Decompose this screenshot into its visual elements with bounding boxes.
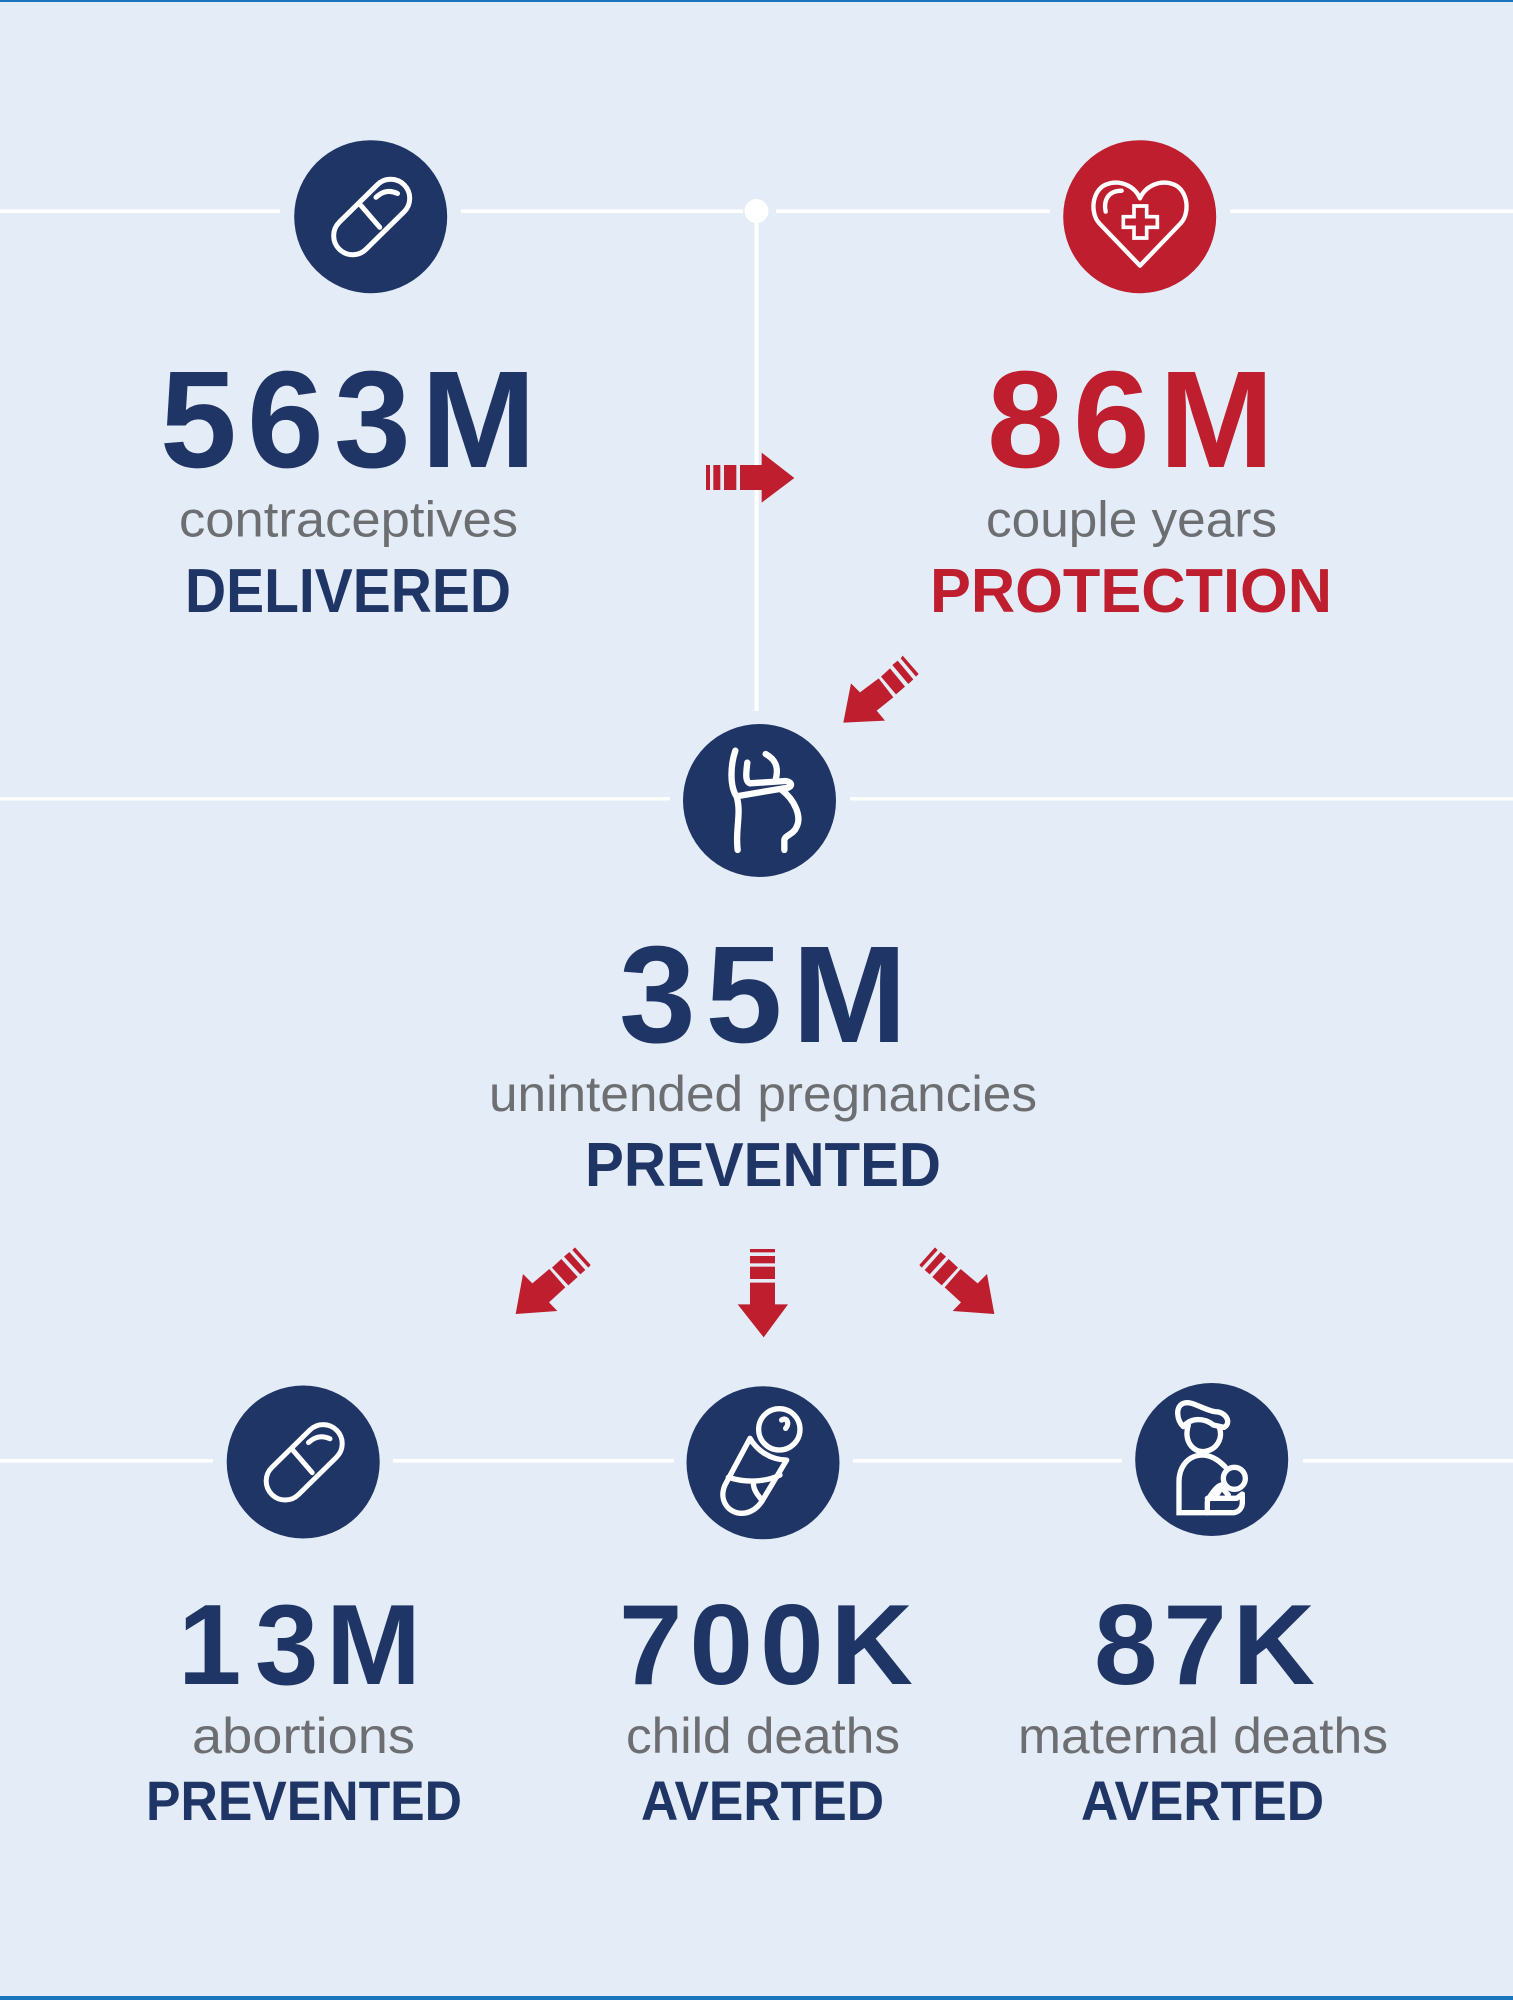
stat: abortions prevented: PREVENTED bbox=[146, 1769, 462, 1832]
stat: unintended pregnancies prevented: 35M bbox=[619, 918, 907, 1072]
stat: abortions prevented: abortions bbox=[192, 1708, 415, 1764]
stat: couple years protection bbox=[930, 343, 1332, 626]
stat: child deaths averted: child deaths bbox=[626, 1708, 900, 1764]
icon: pregnant figure bbox=[683, 724, 836, 877]
stat: contraceptives delivered bbox=[160, 343, 536, 626]
arrows: three outcomes bbox=[516, 1247, 994, 1337]
stat: abortions prevented bbox=[146, 1582, 462, 1832]
stat: unintended pregnancies prevented bbox=[489, 918, 1037, 1200]
icon: pill delivered bbox=[294, 140, 447, 293]
stat: couple years protection: couple years bbox=[986, 492, 1277, 548]
stat: unintended pregnancies prevented: PREVENTED bbox=[585, 1131, 941, 1200]
stat: contraceptives delivered: 563M bbox=[160, 343, 536, 497]
arrow: right bbox=[706, 453, 794, 503]
stat: child deaths averted bbox=[619, 1582, 913, 1832]
arrow: down-left to pregnancy bbox=[843, 656, 919, 723]
stat: abortions prevented: 13M bbox=[178, 1582, 421, 1709]
stat: contraceptives delivered: DELIVERED bbox=[185, 557, 511, 626]
icon: swaddled baby bbox=[686, 1386, 840, 1539]
stat: child deaths averted: AVERTED bbox=[641, 1769, 884, 1832]
icon: heart with cross bbox=[1063, 140, 1216, 293]
stat: maternal deaths averted: AVERTED bbox=[1081, 1769, 1324, 1832]
stat: unintended pregnancies prevented: unintended pregnancies bbox=[489, 1066, 1037, 1122]
icon: pill abortions bbox=[227, 1386, 380, 1538]
stat: couple years protection: PROTECTION bbox=[930, 557, 1332, 626]
stat: maternal deaths averted: maternal deaths bbox=[1018, 1708, 1388, 1764]
connector dot bbox=[744, 199, 768, 223]
stat: contraceptives delivered: contraceptives bbox=[179, 492, 518, 548]
icon: mother and child bbox=[1135, 1383, 1288, 1536]
stat: child deaths averted: 700K bbox=[619, 1582, 913, 1709]
stat: maternal deaths averted: 87K bbox=[1094, 1582, 1315, 1709]
stat: couple years protection: 86M bbox=[987, 343, 1274, 497]
stat: maternal deaths averted bbox=[1018, 1582, 1388, 1832]
